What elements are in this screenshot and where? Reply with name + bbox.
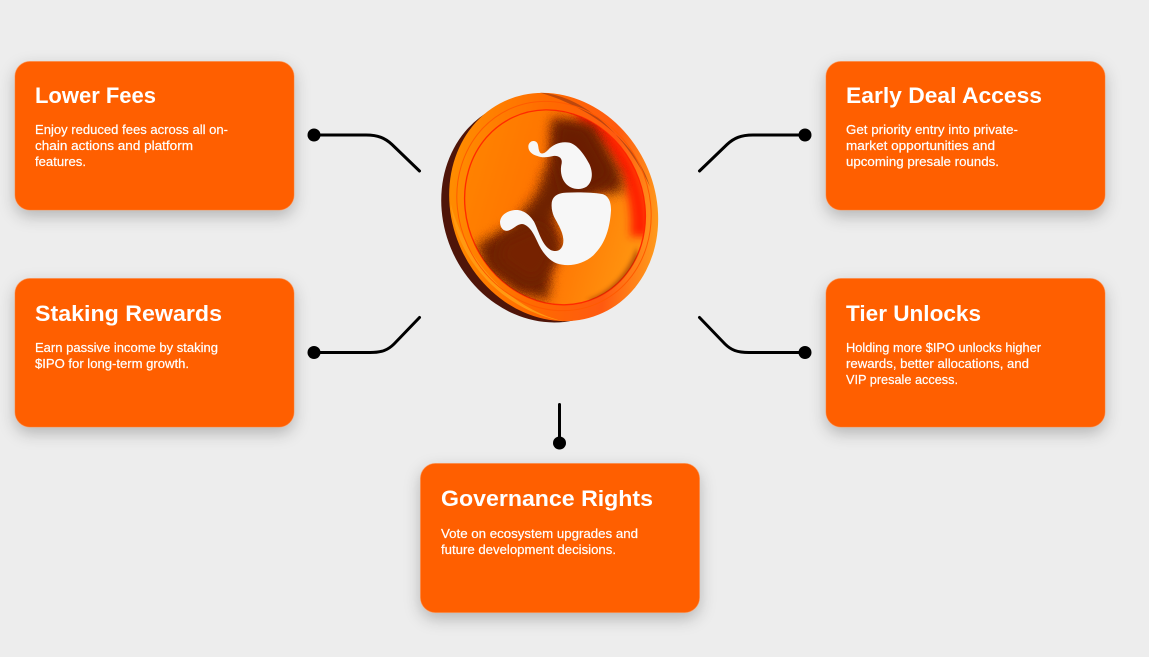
text block: Early Deal Access description: upcoming presale rounds.	[846, 155, 999, 169]
text block: Early Deal Access description: Get priority entry into private-	[846, 123, 1018, 137]
text block: Staking Rewards description: $IPO for long-term growth.	[35, 357, 189, 371]
text block: Governance Rights description: Vote on ecosystem upgrades and	[441, 527, 638, 541]
heading: Early Deal Access: Early Deal Access	[846, 83, 1042, 108]
text block: Tier Unlocks description	[846, 341, 1041, 387]
panel: Staking Rewards	[15, 278, 294, 427]
panel: Tier Unlocks	[826, 278, 1105, 427]
panel: Governance Rights	[420, 464, 700, 612]
heading: Lower Fees: Lower Fees	[35, 83, 156, 108]
arrow: connector to Lower Fees	[308, 128, 420, 171]
heading: Staking Rewards: Staking Rewards	[35, 301, 222, 326]
text block: Lower Fees description	[35, 123, 228, 169]
icon: white logo mark	[500, 141, 611, 265]
icon: orange coin	[441, 92, 658, 322]
text block: Governance Rights description	[441, 527, 638, 557]
text block: Tier Unlocks description: Holding more $IPO unlocks higher	[846, 341, 1041, 355]
arrow: connector to Early Deal Access	[700, 128, 812, 171]
text block: Governance Rights description: future development decisions.	[441, 543, 616, 557]
heading: Governance Rights: Governance Rights	[441, 486, 653, 511]
panel: Early Deal Access	[826, 62, 1105, 210]
text block: Early Deal Access description	[846, 123, 1018, 169]
text block: Lower Fees description: Enjoy reduced fees across all on-	[35, 123, 228, 137]
arrow: connector to Tier Unlocks	[700, 318, 812, 359]
text block: Lower Fees description: features.	[35, 155, 86, 169]
text block: Tier Unlocks description: rewards, better allocations, and	[846, 357, 1029, 371]
panel: Lower Fees	[15, 62, 294, 210]
text block: Staking Rewards description	[35, 341, 218, 371]
arrow: connector to Governance Rights	[553, 404, 566, 450]
text block: Staking Rewards description: Earn passive income by staking	[35, 341, 218, 355]
arrow: connector to Staking Rewards	[308, 318, 420, 359]
text block: Lower Fees description: chain actions and platform	[35, 139, 193, 153]
heading: Tier Unlocks: Tier Unlocks	[846, 301, 981, 326]
text block: Tier Unlocks description: VIP presale access.	[846, 373, 958, 387]
text block: Early Deal Access description: market opportunities and	[846, 139, 995, 153]
